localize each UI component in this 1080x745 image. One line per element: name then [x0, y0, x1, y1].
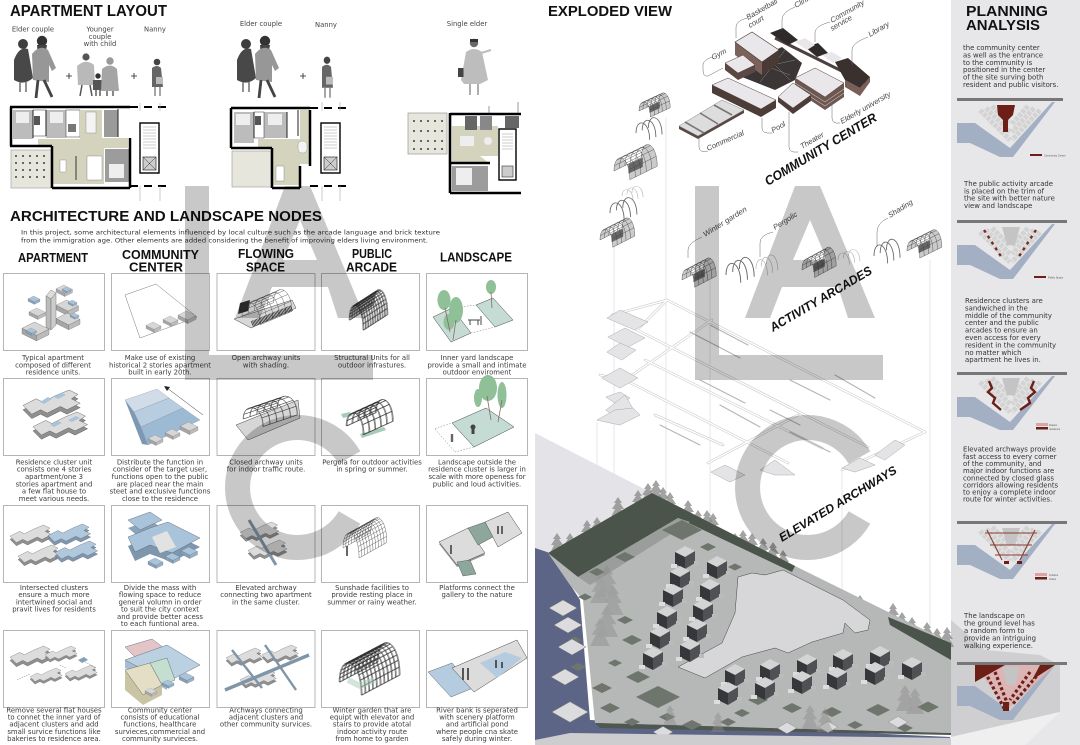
- analysis text 1: the community center: [963, 44, 1040, 52]
- captions row 1: Inner yard landscape: [441, 354, 513, 362]
- apartment type 1 residents: with child: [84, 40, 116, 48]
- intro text: [21, 230, 440, 244]
- activity arcades units: [600, 93, 942, 287]
- captions row 4: consists of educational: [120, 714, 200, 722]
- analysis text 5: provide an intriguing: [964, 634, 1036, 642]
- column headers: SPACE: [246, 261, 285, 275]
- captions row 4: bakeries to residence area.: [7, 735, 101, 743]
- apartment type 1 residents: Nanny: [144, 26, 166, 34]
- row 1 apartment: typical apartment diagram: [22, 285, 80, 341]
- analysis diagram 3: residence clusters: [957, 372, 1067, 431]
- captions row 4: small survice functions like: [7, 728, 101, 736]
- apartment type 1 residents: Younger: [85, 26, 114, 34]
- analysis text 1: of the site surving both: [963, 74, 1043, 82]
- column headers: [18, 247, 512, 275]
- analysis text 2: is placed on the trim of: [964, 187, 1045, 195]
- captions row 2: Distribute the function in: [117, 458, 203, 466]
- captions row 4: where people cna skate: [436, 728, 518, 736]
- captions row 2: apartment/one 3: [25, 473, 83, 481]
- captions row 3: Elevated archway: [235, 584, 297, 592]
- title: activity arcades: ACTIVITY ARCADES: [767, 263, 875, 335]
- apartment type 3 resident: [447, 20, 491, 95]
- captions row 4: River bank is seperated: [436, 706, 518, 714]
- column headers: CENTER: [129, 261, 183, 275]
- analysis text 4: major indoor functions are: [963, 467, 1054, 475]
- analysis diagram 3: residence clusters: Duplex: [1049, 423, 1058, 427]
- captions row 4: [6, 706, 518, 743]
- analysis text 3: no matter which: [965, 349, 1021, 357]
- captions row 4: equipt with elevator and: [330, 714, 414, 722]
- floor plan 1: [10, 103, 167, 201]
- captions row 3: general volumn in order: [118, 598, 202, 606]
- analysis diagram 1: community center: Community Center: [1044, 154, 1066, 158]
- captions row 3: intertwined social and: [16, 598, 92, 606]
- captions row 3: Sunshade facilities to: [335, 584, 409, 592]
- captions row 2: a few flat house to: [22, 488, 86, 496]
- community center exploded model: Pool: [770, 119, 787, 135]
- captions row 2: stories apartment and: [16, 480, 92, 488]
- captions row 3: to suit the city context: [121, 606, 199, 614]
- captions row 3: provide resting place in: [331, 591, 413, 599]
- analysis text 2: view and landscape: [964, 202, 1032, 210]
- captions row 4: Archways connecting: [229, 706, 303, 714]
- column headers: COMMUNITY: [122, 248, 200, 262]
- captions row 4: community survieces.: [122, 735, 198, 743]
- captions row 1: residence units.: [26, 369, 80, 377]
- analysis diagram 2: public arcade: Public Space: [1048, 276, 1064, 280]
- column headers: FLOWING: [238, 247, 294, 261]
- captions row 4: functions, healthcare: [124, 721, 196, 729]
- captions row 1: historical 2 stories apartment: [109, 361, 211, 369]
- analysis text 3: sandwiched in the: [965, 304, 1028, 312]
- site model: ground level: [535, 433, 954, 745]
- analysis diagram 4: elevated archways: [957, 521, 1067, 581]
- captions row 2: are placed near the main: [116, 480, 204, 488]
- captions row 2: steet and exclusive functions: [110, 488, 211, 496]
- analysis diagram 5: landscape: [957, 662, 1067, 720]
- elevated archways network: [597, 300, 925, 482]
- watermark letters L A C, right: [695, 186, 883, 548]
- captions row 2: in spring or summer.: [336, 466, 408, 474]
- captions row 2: residence cluster is larger in: [428, 466, 526, 474]
- analysis diagram 4: elevated archways: Indoor: [1049, 577, 1056, 581]
- row 2 community center: function distribution: [125, 386, 203, 446]
- captions row 2: close to the residence: [122, 495, 198, 503]
- analysis diagram 4: elevated archways: Outdoor: [1049, 573, 1059, 577]
- captions row 3: summer or rainy weather.: [327, 598, 417, 606]
- captions row 4: safely during winter.: [442, 735, 512, 743]
- captions row 2: Closed archway units: [229, 458, 303, 466]
- analysis text 2: The public activity arcade: [964, 180, 1053, 188]
- apartment type 2 residents: [237, 20, 337, 98]
- captions row 3: Intersected clusters: [20, 584, 88, 592]
- row 4 public arcade: winter garden: [339, 643, 400, 695]
- column headers: LANDSCAPE: [440, 251, 512, 265]
- captions row 1: Structural Units for all: [334, 354, 410, 362]
- captions row 1: built in early 20th.: [128, 369, 192, 377]
- captions row 3: and provide better acess: [117, 613, 203, 621]
- captions row 4: Remove several flat houses: [6, 706, 102, 714]
- captions row 3: pravit lives for residents: [12, 606, 96, 614]
- row 1 landscape: inner yard: [433, 280, 513, 342]
- heading: apartment layout: APARTMENT LAYOUT: [10, 3, 168, 20]
- captions row 4: stairs to provide atotal: [333, 721, 411, 729]
- apartment type 2 residents: Nanny: [315, 21, 337, 29]
- captions row 4: indoor activity route: [337, 728, 407, 736]
- heading: exploded view: EXPLODED VIEW: [548, 4, 672, 20]
- activity arcades units: Winter garden: [701, 205, 748, 239]
- row 3 community center: divided mass: [128, 512, 200, 568]
- captions row 1: Open archway units: [232, 354, 300, 362]
- analysis text 3: even access for every: [965, 334, 1041, 342]
- intro text: In this project, some architectural elements influenced by local culture such as the arcade language and brick texture: [21, 230, 440, 237]
- apartment type 3 resident: Single elder: [447, 20, 487, 28]
- captions row 2: Landscape outside the: [438, 458, 516, 466]
- apartment type 1 residents: Elder couple: [12, 26, 54, 34]
- analysis text 3: middle of the community: [965, 312, 1052, 320]
- community center exploded model: Elderly university: [838, 89, 893, 126]
- captions row 4: Community center: [128, 706, 192, 714]
- vertical connection lines: [597, 117, 930, 700]
- captions row 2: meet various needs.: [19, 495, 89, 503]
- floor plan 3: [408, 102, 521, 193]
- captions row 3: [12, 584, 515, 628]
- column headers: ARCADE: [346, 261, 397, 275]
- captions row 1: Make use of existing: [125, 354, 195, 362]
- analysis text 3: resident in the community: [965, 341, 1056, 349]
- row 1 flowing space: open archway: [234, 290, 296, 328]
- captions row 2: for indoor traffic route.: [227, 466, 305, 474]
- analysis text 4: corridors allowing residents: [963, 481, 1059, 489]
- analysis text 3: center and the public: [965, 319, 1039, 327]
- analysis text 5: The landscape on: [964, 612, 1025, 620]
- apartment type 1 residents: [12, 26, 166, 98]
- activity arcades units: Shading: [886, 197, 915, 220]
- analysis diagram 2: public arcade: [957, 220, 1067, 280]
- captions row 2: Residence cluster unit: [16, 458, 92, 466]
- analysis text 1: as well as the entrance: [963, 51, 1043, 59]
- captions row 4: adjacent clusters and: [229, 714, 303, 722]
- community center exploded model: court: [746, 13, 766, 30]
- captions row 1: composed of different: [15, 361, 91, 369]
- captions row 1: outdoor infrastures.: [338, 361, 406, 369]
- right column background panel: [951, 0, 1080, 745]
- captions row 4: other community survices.: [220, 721, 312, 729]
- captions row 3: to each funtional area.: [121, 620, 199, 628]
- row 2 apartment: residence cluster: [23, 390, 88, 439]
- analysis text 4: to enjoy a complete indoor: [963, 489, 1056, 497]
- analysis diagram 3: residence clusters: residence: [1049, 427, 1061, 431]
- floor plan 2: [231, 102, 349, 201]
- analysis text 4: Elevated archways provide: [963, 446, 1056, 454]
- column headers: PUBLIC: [352, 247, 392, 261]
- row 4 flowing space: archway connections: [225, 645, 309, 690]
- community center exploded model: Commercial: [705, 128, 746, 153]
- captions row 3: Divide the mass with: [124, 584, 196, 592]
- analysis text 3: arcades to ensure an: [965, 327, 1038, 335]
- column headers: APARTMENT: [18, 251, 88, 265]
- watermark letters L A C, left: [185, 186, 373, 548]
- heading: planning analysis: ANALYSIS: [966, 17, 1040, 34]
- apartment type 2 residents: Elder couple: [240, 20, 282, 28]
- community center exploded model: Theater: [798, 130, 826, 151]
- title: community center: COMMUNITY CENTER: [762, 109, 880, 189]
- analysis text 1: to the community is: [963, 59, 1033, 67]
- analysis text 5: the ground level has: [964, 620, 1035, 628]
- captions row 3: ensure a much more: [18, 591, 90, 599]
- title: elevated archways: ELEVATED ARCHWAYS: [776, 463, 899, 545]
- community center exploded model: Library: [866, 19, 892, 39]
- analysis text 4: connected by closed glass: [963, 474, 1054, 482]
- captions row 3: gallery to the nature: [442, 591, 512, 599]
- analysis text 2: the site with better nature: [964, 195, 1055, 203]
- captions row 3: Platforms connect the: [439, 584, 515, 592]
- captions row 2: functions open to the public: [112, 473, 209, 481]
- row 1 community center: site with existing apartments: [125, 284, 197, 338]
- captions row 4: to connet the inner yard of: [8, 714, 101, 722]
- captions row 1: outdoor enviroment: [443, 369, 512, 377]
- heading: architecture and landscape nodes: ARCHITECTURE AND LANDSCAPE NODES: [10, 209, 322, 225]
- analysis text 5: walking experience.: [964, 642, 1033, 650]
- analysis text 1: positioned in the center: [963, 66, 1045, 74]
- analysis diagram 1: community center: [957, 98, 1066, 158]
- row 2 public arcade: pergola: [341, 400, 393, 438]
- row 3 public arcade: sunshade: [343, 518, 387, 558]
- captions row 3: connecting two apartment: [220, 591, 312, 599]
- captions row 4: adjacent clusters and add: [9, 721, 99, 729]
- captions row 4: with scenery platform: [439, 714, 515, 722]
- captions row 2: public and loud activities.: [433, 480, 521, 488]
- heading: planning analysis: PLANNING: [966, 3, 1048, 20]
- row 3 apartment: intersected clusters: [10, 524, 98, 566]
- analysis text 1: resident and public visitors.: [963, 81, 1058, 89]
- captions row 1: [15, 354, 526, 377]
- analysis text 5: a random form to: [964, 627, 1025, 635]
- panel frames: [4, 274, 528, 708]
- row 2 landscape: outdoor landscape: [435, 375, 514, 452]
- captions row 2: [16, 458, 526, 503]
- captions row 2: consists one 4 stories: [17, 466, 92, 474]
- intro text: from the immigration age. Other elements are added considering the benefit of improving elders living environment.: [21, 237, 428, 244]
- captions row 2: Pergola for outdoor activities: [322, 458, 422, 466]
- row 3 landscape: platforms: [439, 512, 522, 576]
- row 4 apartment: removed flat houses: [10, 646, 97, 684]
- row 1 public arcade: structural unit: [349, 290, 388, 330]
- captions row 4: Winter garden that are: [333, 706, 411, 714]
- apartment type 1 residents: couple: [89, 33, 111, 41]
- row 4 community center: function colours: [125, 639, 200, 705]
- analysis text 4: fast access to every corner: [963, 453, 1057, 461]
- captions row 4: from home to garden: [335, 735, 409, 743]
- captions row 3: flowing space to reduce: [119, 591, 201, 599]
- captions row 1: with shading.: [243, 361, 289, 369]
- row 3 flowing space: elevated archway: [240, 520, 287, 565]
- analysis text 4: of the community, and: [963, 460, 1042, 468]
- captions row 1: Typical apartment: [22, 354, 84, 362]
- row 4 landscape: river bank: [428, 640, 527, 697]
- analysis text 4: route for winter activities.: [963, 496, 1052, 504]
- community center exploded model: service: [828, 13, 854, 33]
- analysis text 3: apartment he lives in.: [965, 356, 1041, 364]
- captions row 2: consider of the target user,: [113, 466, 207, 474]
- captions row 1: provide a small and intimate: [428, 361, 526, 369]
- community center exploded model: Gym: [710, 46, 728, 62]
- captions row 2: scale with more openess for: [428, 473, 526, 481]
- community center exploded model: [679, 0, 893, 153]
- activity arcades units: Pergolic: [771, 210, 799, 232]
- captions row 4: survieces,commercial and: [115, 728, 205, 736]
- captions row 4: and artificial pond: [446, 721, 508, 729]
- captions row 3: in the same cluster.: [232, 598, 300, 606]
- row 2 flowing space: closed archway: [236, 396, 300, 440]
- analysis text 3: Residence clusters are: [965, 297, 1043, 305]
- heading: planning analysis: [966, 3, 1048, 34]
